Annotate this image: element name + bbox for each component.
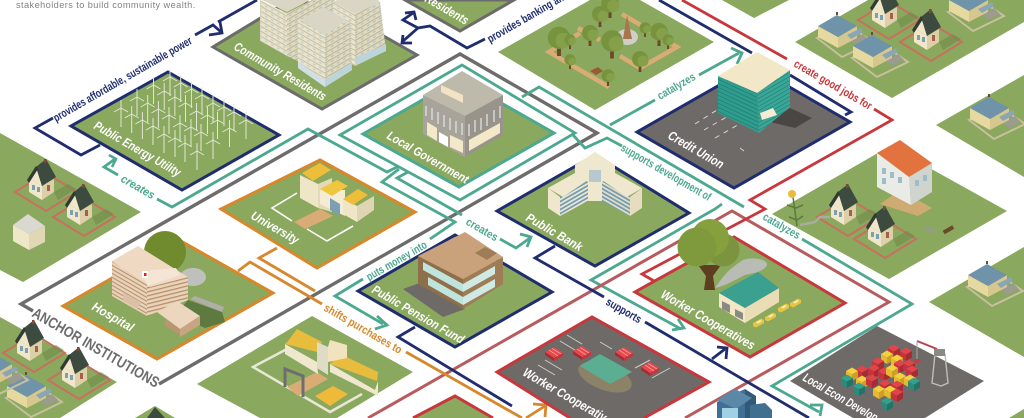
connectors: navy (35, 0, 851, 418)
panel: Local Government (363, 71, 554, 187)
connectors: teal (104, 48, 912, 416)
path (287, 372, 328, 396)
connector: rust outline (368, 211, 889, 418)
label: Public Pension Fund (370, 282, 467, 347)
hospital building (112, 246, 200, 337)
parking (403, 281, 465, 317)
building (548, 152, 642, 216)
panel: Credit Union (637, 52, 850, 188)
building (423, 71, 503, 157)
connector: anchor institutions outline (21, 54, 597, 384)
panel: Public Pension Fund (358, 232, 552, 347)
panel: Worker Cooperatives lot (497, 317, 709, 418)
barn (719, 272, 779, 323)
label: University (248, 208, 302, 248)
fence (253, 349, 362, 412)
sign, gravel and bench (787, 190, 954, 234)
sports court (315, 386, 348, 406)
label: anchor institutions: ANCHOR INSTITUTIONS (29, 305, 162, 391)
canopy (574, 354, 636, 399)
icon: white two-storey house (13, 214, 45, 250)
label: creates bank: creates (464, 216, 500, 244)
intro text: stakeholders to build community wealth. (16, 0, 196, 10)
label: Public Energy Utility (92, 118, 184, 180)
gate (285, 369, 303, 397)
building (300, 163, 374, 222)
tree (678, 219, 740, 290)
pond (715, 258, 767, 288)
label: shifts purchases to: shifts purchases to (322, 302, 404, 357)
connectors: orange (238, 248, 546, 418)
connectors: red (642, 0, 892, 281)
building (718, 52, 790, 133)
label: Credit Union (666, 128, 727, 172)
label: Hospital (90, 299, 137, 335)
manor house (877, 140, 932, 216)
monument (616, 15, 638, 45)
paths (549, 14, 677, 87)
panel: bottom red plot (413, 396, 493, 418)
parking marks (695, 108, 755, 154)
panel: blue office building (717, 389, 772, 418)
panel: Public Bank (497, 152, 689, 266)
panel: park (548, 0, 677, 87)
panel: Residents top (405, 0, 514, 31)
quad fence and path (272, 193, 353, 241)
label: puts money into: puts money into (364, 239, 429, 284)
parking marks (538, 335, 670, 378)
trees (548, 0, 674, 86)
buildings (285, 329, 378, 396)
cars (753, 298, 801, 328)
panel: Local Econ Development (790, 326, 984, 418)
wind turbines (114, 69, 253, 170)
crane and water tower (913, 341, 948, 386)
crates (841, 344, 920, 411)
tree and helipad (144, 231, 225, 328)
label: Community Residents (232, 39, 329, 104)
label: creates energy: creates (118, 173, 157, 202)
connector labels (29, 0, 874, 391)
label: catalyzes econ: catalyzes (760, 211, 802, 242)
panel: Community Residents (213, 0, 417, 109)
label: supports development of: supports development of (618, 142, 713, 204)
panel: Hospital (63, 231, 273, 359)
apartment blocks (260, 0, 386, 87)
panel: school (253, 329, 378, 412)
building (418, 232, 503, 309)
panel: Worker Cooperatives farm (635, 219, 845, 357)
label: Public Bank (524, 210, 586, 255)
label: supports: supports (604, 296, 643, 326)
label: Worker Cooperatives (658, 287, 758, 353)
label: catalyzes credit union: catalyzes (656, 71, 698, 103)
label: provides affordable, sustainable power: provides affordable, sustainable power (52, 35, 195, 125)
label: Local Government (384, 128, 472, 187)
trucks (545, 346, 659, 376)
panel: University (221, 160, 415, 268)
panel: Public Energy Utility (71, 69, 279, 190)
label: create good jobs for: create good jobs for (792, 58, 874, 113)
